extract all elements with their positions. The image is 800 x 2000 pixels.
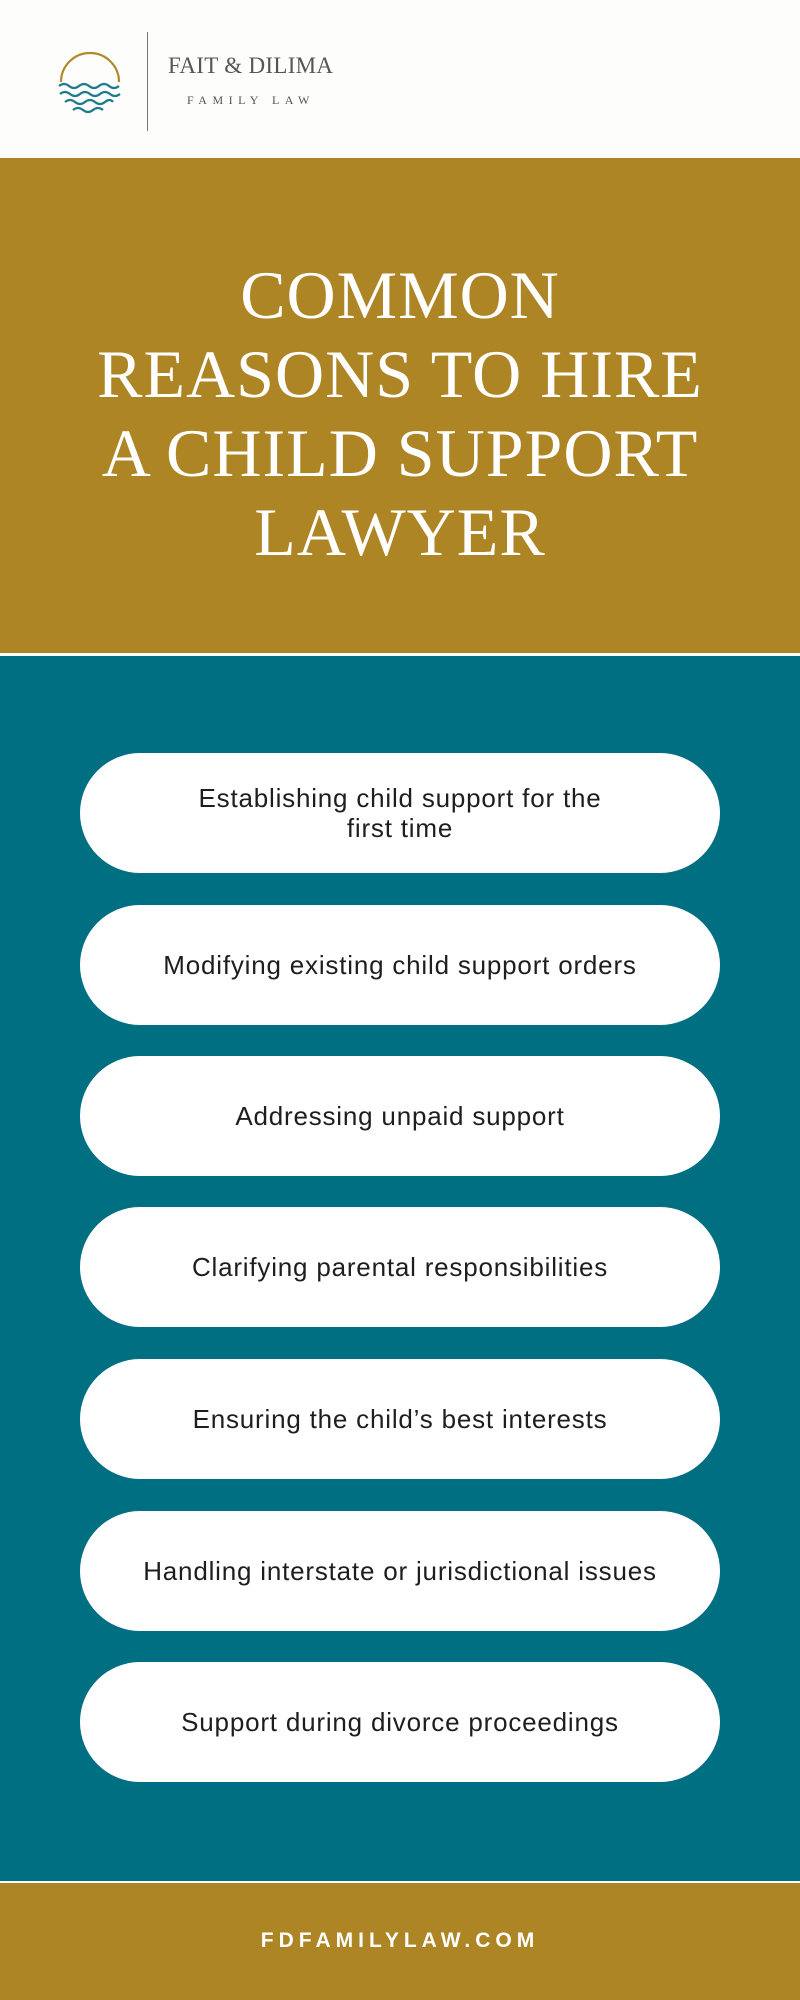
- reason 7: Support during divorce proceedings: [181, 1707, 619, 1737]
- reason 4: Clarifying parental responsibilities: [192, 1252, 608, 1282]
- title: A CHILD SUPPORT: [102, 415, 698, 491]
- reason 7: [80, 1662, 720, 1782]
- header: [0, 0, 800, 158]
- reason 2: Modifying existing child support orders: [163, 950, 637, 980]
- reason 1: [80, 753, 720, 873]
- reason 6: Handling interstate or jurisdictional issues: [143, 1556, 657, 1586]
- reason 5: [80, 1359, 720, 1479]
- reason 6: [80, 1511, 720, 1631]
- divider: [147, 32, 148, 131]
- reason 4: [80, 1207, 720, 1327]
- title: REASONS TO HIRE: [97, 336, 703, 412]
- reason 2: [80, 905, 720, 1025]
- footer: [0, 1883, 800, 2000]
- reason 1: first time: [347, 813, 453, 843]
- brand subtitle: FAMILY LAW: [187, 93, 315, 107]
- title: COMMON: [240, 257, 560, 333]
- footer url: FDFAMILYLAW.COM: [261, 1929, 539, 1952]
- brand name: FAIT & DILIMA: [168, 53, 333, 78]
- icon: logo sun and waves: [58, 52, 121, 114]
- title: [97, 257, 703, 570]
- panel: reasons: [0, 656, 800, 1881]
- title: LAWYER: [254, 494, 546, 570]
- reason 1: Establishing child support for the: [199, 783, 601, 813]
- reason 5: Ensuring the child’s best interests: [193, 1404, 607, 1434]
- reason 3: Addressing unpaid support: [235, 1101, 565, 1131]
- title band: [0, 158, 800, 653]
- reason 3: [80, 1056, 720, 1176]
